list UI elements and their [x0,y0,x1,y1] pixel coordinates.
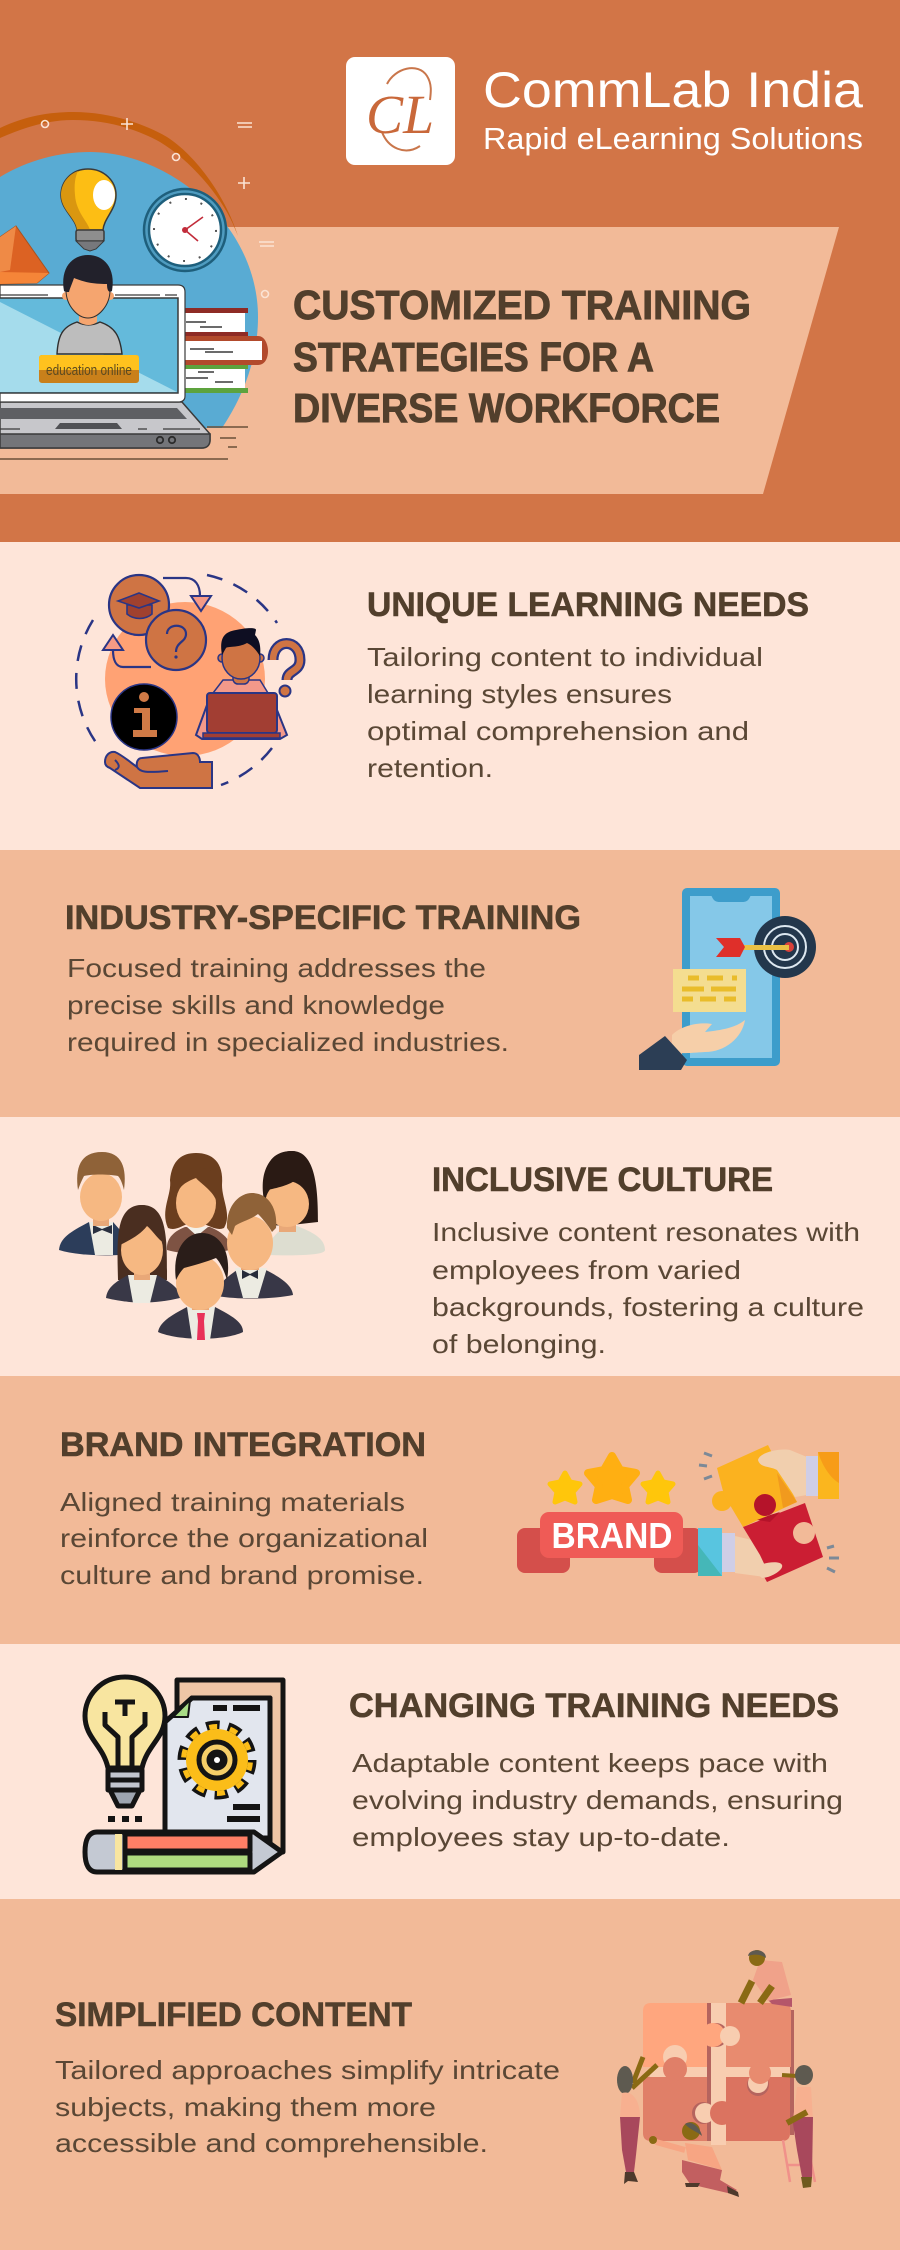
heading: SIMPLIFIED CONTENT [55,1996,412,2034]
icon: clock [144,189,226,271]
person: front man [158,1233,243,1340]
body text [432,1217,864,1359]
body text: Aligned training materials [60,1487,405,1517]
logo wordmark: CommLab India [483,62,863,118]
body text [67,953,509,1057]
body text: of belonging. [432,1329,606,1359]
body text: evolving industry demands, ensuring [352,1785,843,1815]
heading: CHANGING TRAINING NEEDS [349,1687,839,1725]
body text [352,1748,843,1852]
heading: BRAND INTEGRATION [60,1426,426,1464]
body text: Tailored approaches simplify intricate [55,2055,560,2085]
badge: education online [39,355,139,383]
heading: INDUSTRY-SPECIFIC TRAINING [65,899,581,937]
icon: bulb gear document pencil [85,1677,283,1872]
logo wordmark [483,62,863,156]
icon: brand stars and puzzle: BRAND [552,1515,672,1556]
body text [55,2055,560,2158]
body text: backgrounds, fostering a culture [432,1292,864,1322]
panel: header [0,0,900,542]
logo tile [346,57,455,165]
body text: Inclusive content resonates with [432,1217,860,1247]
icon: phone with target [639,888,816,1070]
icon: books [185,308,268,393]
body text: Focused training addresses the [67,953,486,983]
panel: simplified content [0,1899,900,2250]
body text: learning styles ensures [367,679,672,709]
heading: INCLUSIVE CULTURE [432,1161,773,1199]
body text [60,1487,428,1590]
body text: employees stay up-to-date. [352,1822,730,1852]
illustration: team assembling puzzle [617,1950,815,2197]
person: right man [217,1193,293,1299]
figure: top worker [741,1950,792,2007]
person: back left man [59,1152,125,1255]
figure: right worker [782,2065,815,2188]
title [293,282,751,431]
body text: retention. [367,753,493,783]
puzzle [643,2003,794,2145]
decorative sparkles [42,118,274,298]
body text: accessible and comprehensible. [55,2128,488,2158]
body text [367,642,763,783]
illustration: online education [0,118,274,459]
body text: required in specialized industries. [67,1027,509,1057]
person: middle woman [165,1153,230,1254]
title: STRATEGIES FOR A [293,334,654,380]
illustration: group of people [59,1151,325,1340]
logo tile: CL [366,84,434,145]
body text: optimal comprehension and [367,716,749,746]
title: DIVERSE WORKFORCE [293,385,720,431]
body text: reinforce the organizational [60,1523,428,1553]
title banner [0,227,839,494]
figure: bottom worker [649,2122,739,2197]
body text: Adaptable content keeps pace with [352,1748,828,1778]
panel: unique learning needs [0,542,900,850]
body text: precise skills and knowledge [67,990,445,1020]
icon: brand stars and puzzle [517,1445,839,1582]
title: CUSTOMIZED TRAINING [293,282,751,328]
body text: culture and brand promise. [60,1560,424,1590]
body text: employees from varied [432,1255,741,1285]
heading: UNIQUE LEARNING NEEDS [367,586,809,624]
figure: left worker [617,2057,657,2184]
panel: brand integration [0,1376,900,1644]
figure: person [57,255,122,354]
logo wordmark: Rapid eLearning Solutions [483,121,863,156]
icon: pyramid [0,226,49,284]
body text: subjects, making them more [55,2092,436,2122]
panel: changing training needs [0,1644,900,1899]
icon: laptop [0,285,248,459]
icon: learner with question marks [76,575,300,788]
person: left woman [106,1205,180,1303]
body text: Tailoring content to individual [367,642,763,672]
badge: education online: education online [46,362,132,379]
decorative arc [0,112,238,236]
panel: inclusive culture [0,1117,900,1376]
panel: industry-specific training [0,850,900,1117]
icon: light bulb [61,169,116,251]
person: back right woman [263,1151,325,1255]
